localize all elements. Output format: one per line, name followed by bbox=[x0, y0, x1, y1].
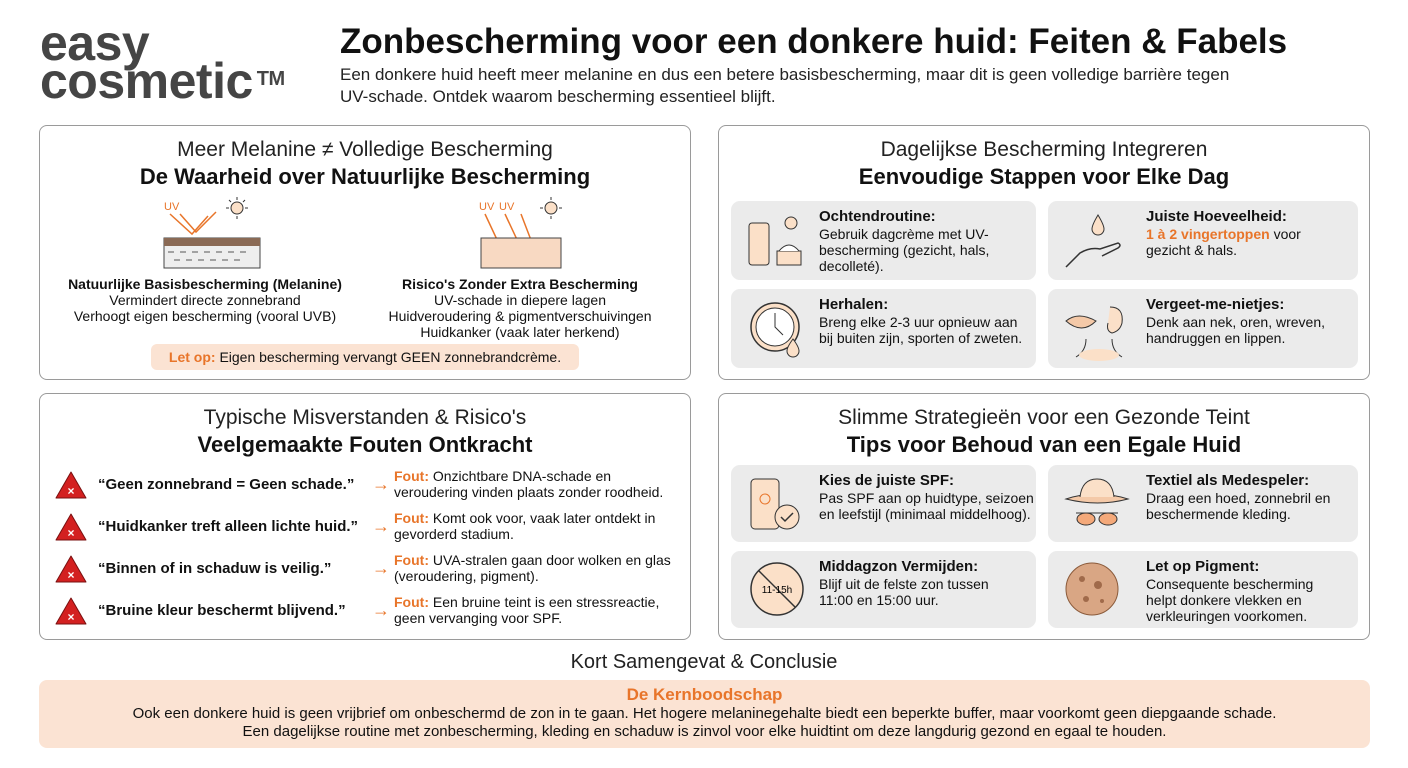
card: herhalen: Herhalen: bbox=[819, 296, 888, 313]
panel: natural protection: Meer Melanine ≠ Volledige Bescherming bbox=[177, 138, 553, 161]
subtitle: UV-schade. Ontdek waarom bescherming essentieel blijft. bbox=[340, 87, 776, 106]
callout: let op: Let op: Eigen bescherming vervangt GEEN zonnebrandcrème. bbox=[169, 349, 561, 365]
myth row 4 bbox=[56, 594, 659, 626]
icon: skin melanine: UV bbox=[164, 201, 180, 213]
icon: skin risk: UV bbox=[479, 201, 495, 213]
myth row 1 bbox=[56, 468, 663, 500]
card: textiel: Draag een hoed, zonnebril en bbox=[1146, 490, 1330, 506]
panel: dagelijkse bescherming: Dagelijkse Bescherming Integreren bbox=[881, 138, 1207, 161]
icon: skin risk bbox=[479, 197, 562, 268]
subtitle bbox=[340, 65, 1229, 106]
myth row 1: Fout: Onzichtbare DNA-schade en bbox=[394, 468, 611, 484]
myth row 3: “Binnen of in schaduw is veilig.” bbox=[98, 560, 331, 577]
card: middagzon: Blijf uit de felste zon tussen bbox=[819, 576, 989, 592]
conclusion box: De Kernboodschap bbox=[627, 685, 782, 704]
conclusion box bbox=[39, 680, 1370, 748]
panel: misverstanden: Typische Misverstanden & Risico's bbox=[204, 406, 526, 429]
panel: natural protection: De Waarheid over Natuurlijke Bescherming bbox=[140, 164, 590, 189]
text: natuurlijke basisbescherming: Verhoogt eigen bescherming (vooral UVB) bbox=[74, 308, 336, 324]
card: juiste hoeveelheid: 1 à 2 vingertoppen voor bbox=[1146, 226, 1301, 242]
card: middagzon: 11-15h bbox=[762, 585, 792, 596]
card: ochtendroutine: Ochtendroutine: bbox=[819, 208, 936, 225]
text: risico's: Huidkanker (vaak later herkend) bbox=[420, 324, 620, 340]
card: SPF bbox=[731, 465, 1036, 542]
text: risico's: Risico's Zonder Extra Bescherming bbox=[402, 276, 638, 292]
card: juiste hoeveelheid bbox=[1048, 201, 1358, 280]
logo: easy bbox=[40, 15, 149, 71]
panel: dagelijkse bescherming bbox=[718, 125, 1370, 380]
myth row 1: veroudering vinden plaats zonder roodheid. bbox=[394, 484, 663, 500]
myth row 1: → bbox=[372, 474, 390, 494]
card: ochtendroutine bbox=[731, 201, 1036, 280]
card: juiste hoeveelheid: Juiste Hoeveelheid: bbox=[1146, 208, 1287, 225]
myth row 1: × bbox=[67, 484, 75, 498]
conclusion box: Een dagelijkse routine met zonbescherming, kleding en schaduw is zinvol voor elke huidtint om deze langdurig gezond en egaal te houden. bbox=[243, 723, 1166, 740]
myth row 3 bbox=[56, 552, 671, 584]
card: ochtendroutine: decolleté). bbox=[819, 258, 884, 274]
text: risico's: UV-schade in diepere lagen bbox=[434, 292, 606, 308]
conclusion box: Ook een donkere huid is geen vrijbrief om onbeschermd de zon in te gaan. Het hogere melaninegehalte biedt een beperkte buffer, maar voorkomt geen diepgaande schade. bbox=[133, 705, 1276, 722]
panel: natural protection bbox=[39, 125, 691, 380]
panel: dagelijkse bescherming: Eenvoudige Stappen voor Elke Dag bbox=[859, 164, 1229, 189]
card: middagzon: Middagzon Vermijden: bbox=[819, 558, 978, 575]
card: juiste hoeveelheid: gezicht & hals. bbox=[1146, 242, 1237, 258]
myth row 3: Fout: UVA-stralen gaan door wolken en glas bbox=[394, 552, 671, 568]
card: pigment bbox=[1048, 551, 1358, 628]
myth row 4: “Bruine kleur beschermt blijvend.” bbox=[98, 602, 346, 619]
myth row 3: (veroudering, pigment). bbox=[394, 568, 539, 584]
text: natuurlijke basisbescherming: Natuurlijke Basisbescherming (Melanine) bbox=[68, 276, 342, 292]
myth row 2: → bbox=[372, 516, 390, 536]
logo: cosmeticTM bbox=[40, 53, 285, 109]
card: textiel bbox=[1048, 465, 1358, 542]
myth row 2: × bbox=[67, 526, 75, 540]
card: SPF: Pas SPF aan op huidtype, seizoen bbox=[819, 490, 1034, 506]
panel: slimme strategieën: Tips voor Behoud van een Egale Huid bbox=[847, 432, 1241, 457]
card: herhalen bbox=[731, 289, 1036, 368]
card: pigment: Consequente bescherming bbox=[1146, 576, 1313, 592]
text: natuurlijke basisbescherming bbox=[68, 276, 342, 324]
text: risico's: Huidveroudering & pigmentverschuivingen bbox=[388, 308, 652, 324]
card: vergeet-me-nietjes: handruggen en lippen. bbox=[1146, 330, 1285, 346]
panel: slimme strategieën bbox=[718, 393, 1370, 640]
icon: skin risk: UV bbox=[499, 201, 515, 213]
panel: misverstanden: Veelgemaakte Fouten Ontkracht bbox=[198, 432, 532, 457]
card: textiel: beschermende kleding. bbox=[1146, 506, 1291, 522]
myth row 4: × bbox=[67, 610, 75, 624]
myth row 2 bbox=[56, 510, 655, 542]
card: middagzon: 11:00 en 15:00 uur. bbox=[819, 592, 939, 608]
text: risico's bbox=[388, 276, 652, 340]
myth row 1: “Geen zonnebrand = Geen schade.” bbox=[98, 476, 354, 493]
card: textiel: Textiel als Medespeler: bbox=[1146, 472, 1309, 489]
card: vergeet-me-nietjes: Denk aan nek, oren, wreven, bbox=[1146, 314, 1325, 330]
card: ochtendroutine: Gebruik dagcrème met UV- bbox=[819, 226, 989, 242]
myth row 4: Fout: Een bruine teint is een stressreactie, bbox=[394, 594, 659, 610]
myth row 3: × bbox=[67, 568, 75, 582]
card: vergeet-me-nietjes: Vergeet-me-nietjes: bbox=[1146, 296, 1284, 313]
myth row 2: gevorderd stadium. bbox=[394, 526, 514, 542]
logo bbox=[40, 15, 285, 109]
card: herhalen: bij buiten zijn, sporten of zweten. bbox=[819, 330, 1022, 346]
panel: slimme strategieën: Slimme Strategieën voor een Gezonde Teint bbox=[838, 406, 1250, 429]
card: pigment: helpt donkere vlekken en bbox=[1146, 592, 1302, 608]
card: ochtendroutine: bescherming (gezicht, hals, bbox=[819, 242, 989, 258]
card: vergeet-me-nietjes bbox=[1048, 289, 1358, 368]
myth row 4: → bbox=[372, 600, 390, 620]
callout: let op bbox=[151, 344, 579, 370]
card: pigment: verkleuringen voorkomen. bbox=[1146, 608, 1307, 624]
subtitle: Een donkere huid heeft meer melanine en dus een betere basisbescherming, maar dit is geen volledige barrière tegen bbox=[340, 65, 1229, 84]
myth row 4: geen vervanging voor SPF. bbox=[394, 610, 562, 626]
card: SPF: Kies de juiste SPF: bbox=[819, 472, 954, 489]
card: herhalen: Breng elke 2-3 uur opnieuw aan bbox=[819, 314, 1017, 330]
myth row 2: Fout: Komt ook voor, vaak later ontdekt in bbox=[394, 510, 655, 526]
conclusion heading: Kort Samengevat & Conclusie bbox=[571, 651, 837, 673]
panel: misverstanden bbox=[39, 393, 691, 640]
text: natuurlijke basisbescherming: Vermindert directe zonnebrand bbox=[109, 292, 301, 308]
myth row 2: “Huidkanker treft alleen lichte huid.” bbox=[98, 518, 358, 535]
myth row 3: → bbox=[372, 558, 390, 578]
icon: skin melanine bbox=[164, 197, 260, 268]
card: pigment: Let op Pigment: bbox=[1146, 558, 1259, 575]
card: SPF: en leefstijl (minimaal middelhoog). bbox=[819, 506, 1031, 522]
title: Zonbescherming voor een donkere huid: Feiten & Fabels bbox=[340, 22, 1287, 61]
card: middagzon bbox=[731, 551, 1036, 628]
